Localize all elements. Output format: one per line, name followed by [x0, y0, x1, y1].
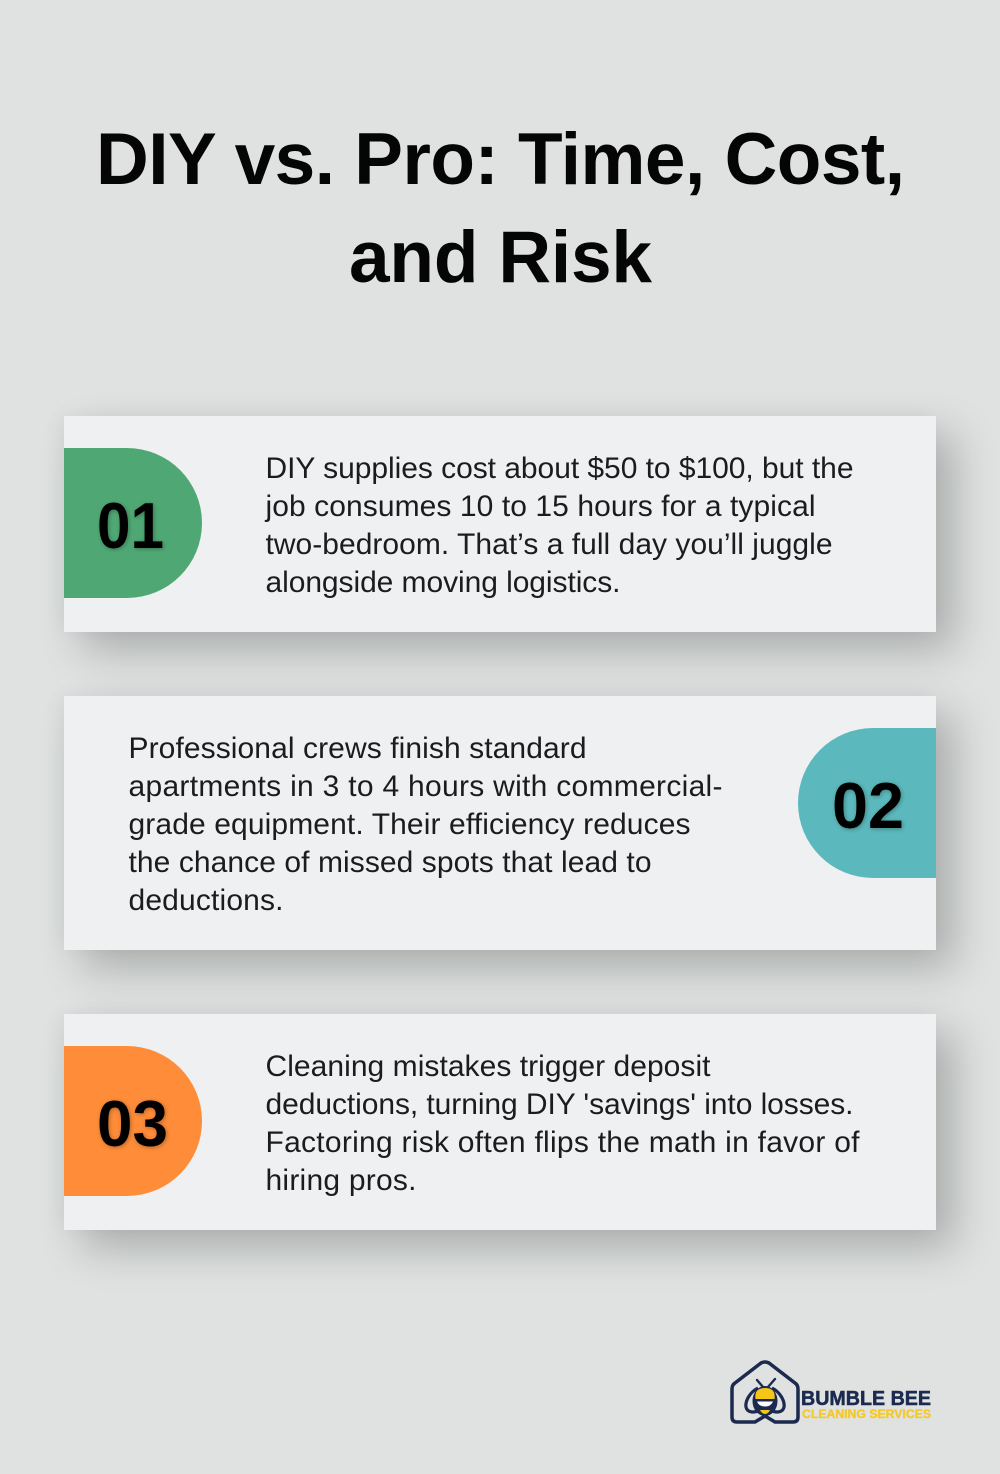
- badge: 03: [64, 1046, 202, 1196]
- text block: step 02: Professional crews finish standard: [128, 732, 586, 765]
- text block: step 01: job consumes 10 to 15 hours for a typical: [264, 490, 816, 523]
- badge: 01: [64, 448, 202, 598]
- text block: step 03: deductions, turning DIY 'savings' into losses.: [266, 1088, 854, 1121]
- panel: card 1 background: [64, 416, 936, 632]
- text block: step 02: the chance of missed spots that lead to: [128, 846, 652, 879]
- panel: card 3 background: [64, 1014, 936, 1230]
- text block: step 01: [264, 452, 854, 599]
- title: and Risk: [349, 217, 652, 298]
- text block: step 02: apartments in 3 to 4 hours with commercial-: [128, 770, 722, 803]
- panel: step 01: [64, 448, 854, 599]
- logo: Bumble Bee Cleaning Services: [732, 1362, 931, 1422]
- text block: step 01: alongside moving logistics.: [266, 566, 620, 599]
- text block: step 02: [128, 732, 722, 917]
- logo wordmark: BUMBLE BEE: [801, 1388, 931, 1410]
- badge: 03: 03: [97, 1087, 168, 1160]
- panel: card 2 background: [64, 696, 936, 950]
- text block: step 03: Factoring risk often flips the math in favor of: [266, 1126, 860, 1159]
- badge: 02: [798, 728, 936, 878]
- badge: 02: 02: [832, 769, 904, 842]
- text block: step 01: two-bedroom. That’s a full day you’ll juggle: [266, 528, 832, 561]
- logo tagline: CLEANING SERVICES: [802, 1407, 931, 1421]
- text block: step 03: Cleaning mistakes trigger deposit: [266, 1050, 711, 1083]
- title: [96, 119, 905, 298]
- title: DIY vs. Pro: Time, Cost,: [96, 119, 905, 200]
- panel: step 02: [128, 728, 936, 917]
- badge: 01: 01: [97, 489, 164, 562]
- text block: step 01: DIY supplies cost about $50 to $100, but the: [266, 452, 854, 485]
- text block: step 03: hiring pros.: [266, 1164, 416, 1197]
- icon: house with bee: [732, 1362, 798, 1422]
- text block: step 03: [266, 1050, 860, 1197]
- text block: step 02: deductions.: [128, 884, 284, 917]
- panel: step 03: [64, 1046, 860, 1197]
- text block: step 02: grade equipment. Their efficiency reduces: [128, 808, 690, 841]
